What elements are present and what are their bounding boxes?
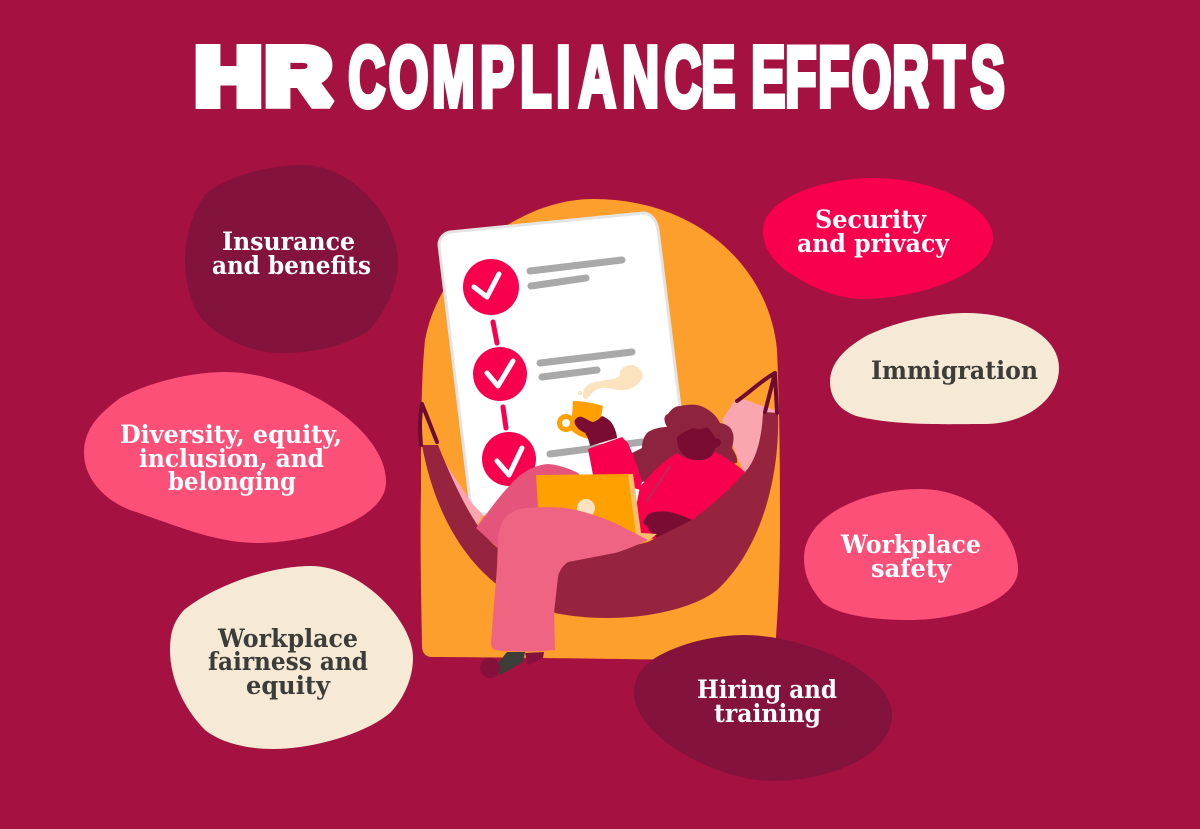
illustration: person in hammock with checklist bbox=[420, 199, 780, 678]
bubble: hiring and training: training bbox=[714, 699, 821, 728]
bubble: security and privacy bbox=[763, 178, 993, 299]
bubble: workplace safety: Workplace bbox=[840, 530, 981, 559]
connector bbox=[503, 407, 506, 428]
bubble: workplace fairness and equity: Workplace bbox=[217, 624, 358, 653]
sweater arm bbox=[588, 437, 642, 490]
bubble: workplace safety: safety bbox=[871, 554, 952, 583]
bubble: diversity, equity, inclusion, and belonging: Diversity, equity, bbox=[120, 420, 342, 449]
bubble: workplace fairness and equity: fairness and bbox=[208, 647, 368, 676]
bubble: insurance and benefits: Insurance bbox=[222, 227, 355, 256]
cup bbox=[560, 401, 603, 439]
checklist item 2 bbox=[473, 347, 632, 401]
back leg bbox=[476, 464, 640, 548]
bubble: diversity, equity, inclusion, and belonging bbox=[84, 372, 386, 543]
bubble: insurance and benefits: and benefits bbox=[212, 251, 371, 280]
title: COMPLIANCE bbox=[348, 30, 735, 124]
bubble: security and privacy: and privacy bbox=[797, 229, 950, 258]
title bbox=[195, 30, 1005, 124]
connector bbox=[493, 322, 497, 343]
orange arch background bbox=[421, 199, 780, 660]
title: EFFORTS bbox=[751, 30, 1005, 124]
title: HR bbox=[195, 33, 332, 122]
checklist item 3 bbox=[482, 432, 642, 486]
bubble: hiring and training bbox=[634, 635, 892, 781]
bubble: security and privacy: Security bbox=[815, 205, 927, 234]
hammock back fabric bbox=[438, 397, 775, 530]
bubble: diversity, equity, inclusion, and belonging: inclusion, and bbox=[139, 444, 324, 473]
sweater crease bbox=[647, 466, 670, 501]
bubble: immigration bbox=[830, 313, 1059, 424]
hammock bbox=[422, 412, 778, 618]
face bbox=[677, 427, 721, 460]
checklist card bbox=[439, 213, 690, 520]
bubble: hiring and training: Hiring and bbox=[697, 675, 837, 704]
bubble: workplace fairness and equity bbox=[170, 566, 413, 749]
bubble: immigration: Immigration bbox=[871, 356, 1038, 385]
bubble: workplace fairness and equity: equity bbox=[246, 671, 331, 700]
bubble: workplace safety bbox=[804, 489, 1018, 620]
laptop bbox=[536, 474, 657, 541]
bubble: insurance and benefits bbox=[185, 165, 398, 353]
front leg bbox=[491, 507, 648, 652]
hand on laptop bbox=[643, 511, 692, 540]
steam bbox=[578, 365, 643, 399]
hammock ropes bbox=[420, 373, 777, 445]
sweater body bbox=[636, 451, 745, 540]
checklist item 1 bbox=[463, 259, 622, 315]
socks and feet bbox=[480, 652, 544, 678]
hand holding cup bbox=[575, 416, 617, 446]
bubble: diversity, equity, inclusion, and belonging: belonging bbox=[168, 467, 296, 496]
hair bbox=[632, 405, 737, 482]
